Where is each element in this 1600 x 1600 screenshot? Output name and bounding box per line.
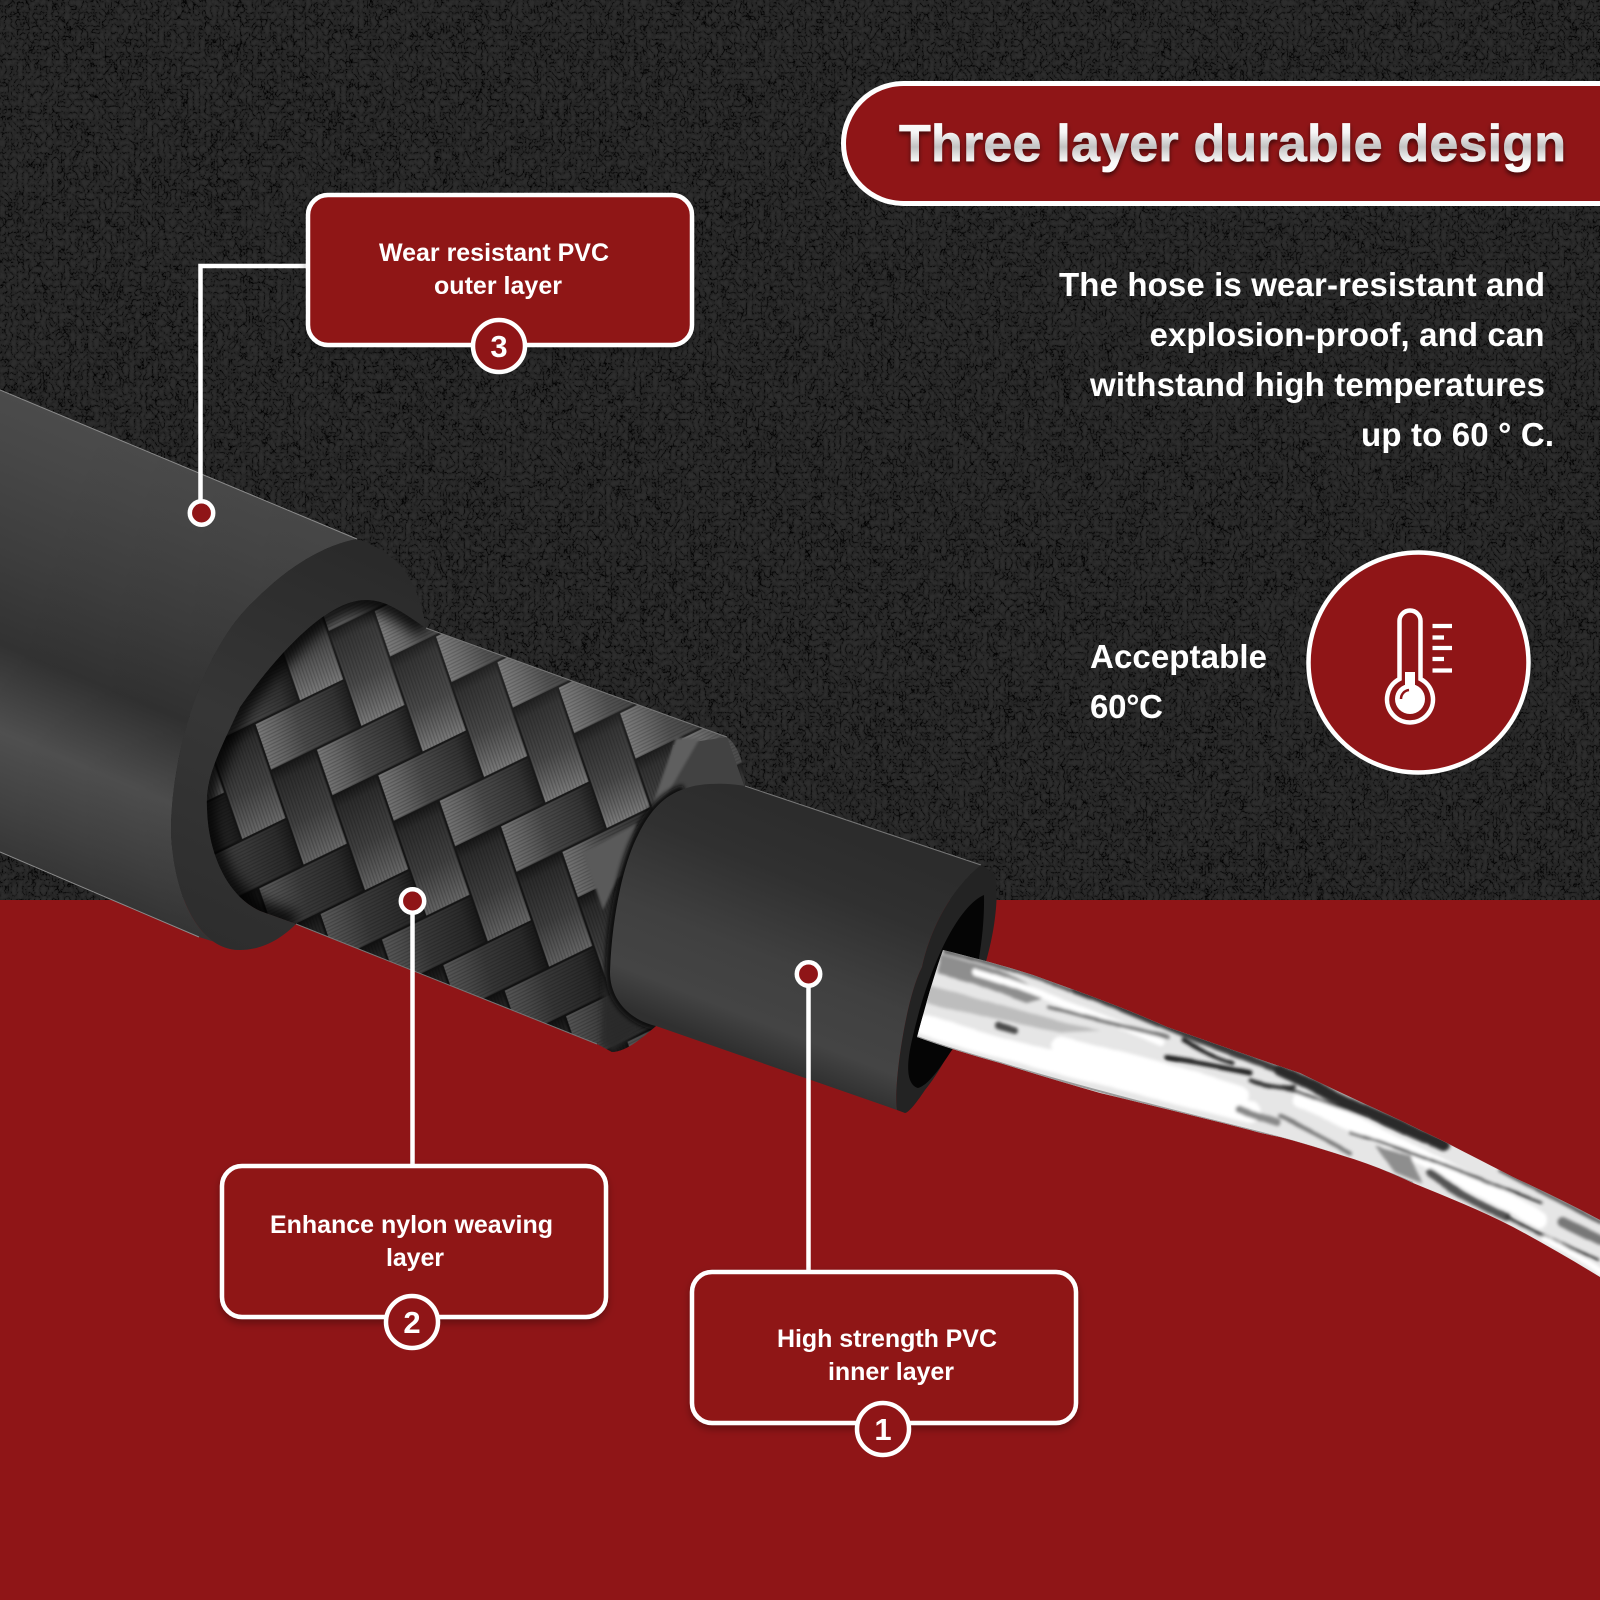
title banner [844,84,1600,204]
description text: withstand high temperatures [1089,366,1545,403]
frayed strand near inner tube [583,823,637,910]
callout box 1: inner layer: inner layer [828,1358,954,1386]
callout box 3: outer layer: 3 [490,329,508,364]
bright band below top edge [975,972,1160,1042]
dark textured background [0,0,1600,910]
callout: inner layer connector and pointer [797,962,820,1272]
temperature scale ticks [1432,626,1452,670]
acceptable temperature label: 60°C [1090,688,1163,725]
callout box 2: weaving layer: Enhance nylon weaving [270,1211,553,1239]
dark upper edge of stream [945,951,1070,990]
soft lower edge of stream [917,1037,1413,1183]
callout box 1: inner layer: 1 [874,1412,892,1447]
callout box 1: inner layer: High strength PVC [777,1325,997,1353]
red lower background [0,900,1600,1600]
callout box 1: inner layer [692,1272,1076,1455]
inner layer end face [896,865,997,1113]
inner PVC layer tube [610,784,981,1110]
description text [1059,266,1554,453]
acceptable temperature label [1090,638,1267,725]
nylon weaving layer [207,601,745,1052]
callout box 2: weaving layer: 2 [403,1305,421,1340]
callout: weaving layer connector and pointer [401,889,424,1165]
callout box 2: weaving layer [222,1166,606,1348]
hose cross-section [0,390,1600,1300]
callout: outer layer connector and pointer [190,266,306,525]
thermometer tube and bulb [1387,610,1433,722]
callout box 3: outer layer: outer layer [434,272,562,300]
acceptable temperature label: Acceptable [1090,638,1267,675]
weave shadow inside outer layer [207,600,426,924]
frayed braid collar at top [672,738,744,788]
callout box 3: outer layer: Wear resistant PVC [379,239,609,267]
dark inner streaks [1050,1007,1167,1037]
callout box 3: outer layer [308,195,692,372]
description text: The hose is wear-resistant and [1059,266,1545,303]
inner layer opening [908,895,984,1088]
outer PVC layer tube [0,390,357,950]
braid opening dark interior [207,600,500,924]
upper grey region near nozzle [937,953,1050,1003]
description text: explosion-proof, and can [1150,316,1544,353]
icon: thermometer badge [1308,552,1528,772]
title text: Three layer durable design [899,115,1566,173]
outer layer cut face ring [171,539,426,950]
water stream [917,950,1600,1277]
callout box 2: weaving layer: layer [386,1244,444,1272]
description text: up to 60 ° C. [1361,416,1554,453]
